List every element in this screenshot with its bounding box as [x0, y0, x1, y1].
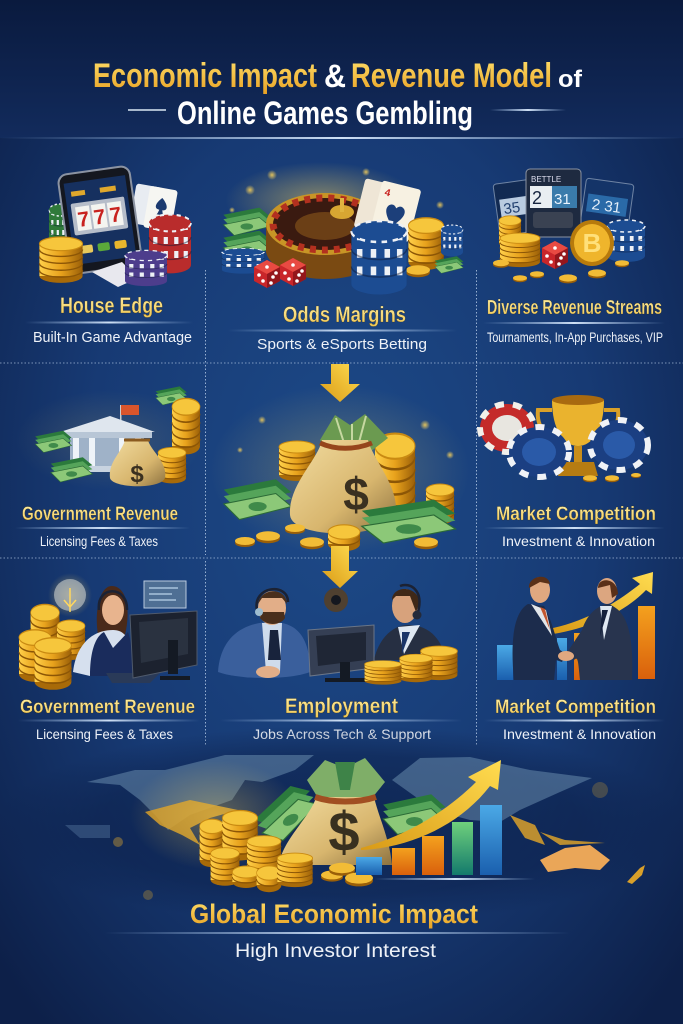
icon: tablets, coins, bitcoin: 2 31: [591, 196, 622, 217]
text: High Investor Interest: [235, 941, 437, 962]
icon: roulette, chips, dice: 4: [383, 187, 392, 199]
icon: casino phone, chips and cards: [39, 165, 191, 287]
text: Investment & Innovation: [503, 726, 656, 742]
heading: Government Revenue: [22, 504, 178, 525]
panel: market competition (lower row): [484, 572, 665, 742]
panel: central money bag: [210, 385, 470, 555]
title: [93, 57, 583, 131]
panel: house edge: [25, 165, 193, 346]
text: Sports & eSports Betting: [257, 336, 427, 353]
icon: money bag and coins: [200, 758, 446, 892]
icon: roulette, chips, dice: [222, 162, 463, 294]
title: of: [558, 66, 583, 93]
title: Revenue Model: [351, 57, 552, 95]
icon: tablets, coins, bitcoin: 2: [532, 188, 542, 208]
panel: government revenue (lower row): [18, 573, 200, 742]
text: Investment & Innovation: [502, 533, 655, 549]
heading: Global Economic Impact: [190, 899, 478, 929]
title: Online Games Gembling: [177, 95, 473, 131]
icon: tablets, coins, bitcoin: 35: [502, 199, 521, 218]
icon: tablets, coins, bitcoin: [493, 169, 645, 283]
text: Licensing Fees & Taxes: [40, 533, 158, 549]
title: Economic Impact: [93, 57, 317, 95]
icon: tablets, coins, bitcoin: 31: [554, 191, 571, 208]
arrow: down from top row: [320, 364, 360, 402]
icon: support agent with coins: [19, 573, 197, 690]
icon: trophy and poker chips: [480, 395, 648, 482]
slot sevens: 777: [76, 203, 123, 232]
heading: House Edge: [60, 293, 163, 318]
icon: bank, money bag, coins: $: [130, 461, 144, 488]
bar chart with rising arrow: [356, 760, 535, 880]
icon: bank, money bag, coins: [15, 386, 205, 490]
text: Built-In Game Advantage: [33, 329, 192, 346]
panel: government revenue (middle row): [15, 386, 205, 549]
panel dividers: [0, 270, 683, 745]
panel: global economic impact: [0, 725, 683, 962]
heading: Market Competition: [495, 697, 656, 718]
panel: employment: [218, 585, 462, 742]
icon: tablets, coins, bitcoin: BETTLE: [531, 175, 561, 184]
title: &: [324, 58, 346, 94]
icon: money bag and coins: $: [328, 800, 360, 863]
arrow: down from centre: [322, 546, 358, 588]
icon: workers with headsets, monitor, coins: [218, 585, 457, 685]
text: Jobs Across Tech & Support: [253, 726, 431, 742]
panel: market competition (middle row): [480, 395, 665, 549]
icon: handshake with bar chart: [497, 572, 655, 680]
heading: Government Revenue: [20, 697, 195, 718]
panel: diverse revenue streams: [483, 169, 665, 345]
panel: odds margins: [222, 162, 463, 353]
header band: [0, 0, 683, 139]
icon: world map: [0, 725, 683, 925]
heading: Market Competition: [496, 504, 656, 525]
text: Licensing Fees & Taxes: [36, 726, 173, 742]
icon: tablets, coins, bitcoin: B: [583, 228, 601, 258]
heading: Employment: [285, 695, 398, 718]
heading: Odds Margins: [283, 302, 406, 327]
dollar sign: $: [343, 468, 369, 520]
